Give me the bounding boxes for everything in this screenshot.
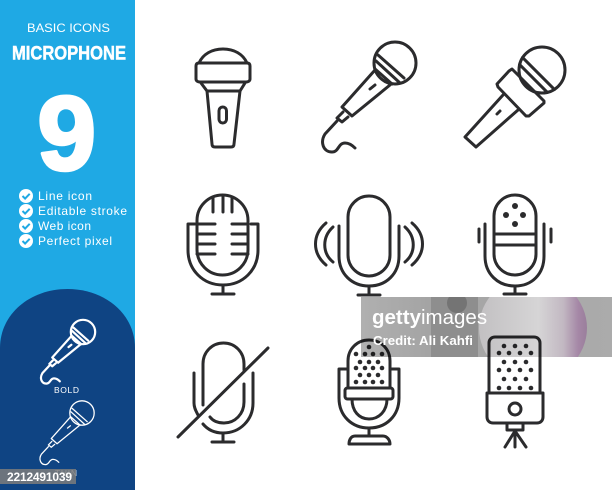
number: 9: 9 [38,76,96,192]
icon: corded microphone [323,42,416,152]
panel: dark arch with stroke styles [0,289,135,490]
image id tag: 2212491039 [7,470,72,484]
icon: studio microphone with ticks [188,195,258,294]
icon: handheld microphone upright [196,49,250,147]
icon: microphone with dots [479,195,551,294]
label: thin: THIN [55,468,77,478]
item: editable stroke: Editable stroke [38,204,127,218]
item: web icon: Web icon [38,219,91,233]
watermark logo: gettyimages [372,306,487,329]
icon: muted microphone [178,343,268,442]
watermark credit: Credit: Ali Kahfi [373,333,473,348]
icon: microphone with sound waves [316,196,422,295]
watermark band [361,297,612,357]
item: perfect pixel: Perfect pixel [38,234,112,248]
panel: blue sidebar [0,0,135,490]
icon: condenser microphone on tripod [487,337,543,447]
item: line icon: Line icon [38,189,92,203]
icon: bold microphone [41,320,95,384]
label: bold: BOLD [54,385,79,395]
icon: reporter microphone [465,47,565,147]
heading: microphone: MICROPHONE [12,44,126,64]
icon: vintage microphone [339,340,399,444]
feature list [19,189,127,248]
label: basic icons: BASIC ICONS [27,21,110,35]
icon: thin microphone [40,401,94,465]
